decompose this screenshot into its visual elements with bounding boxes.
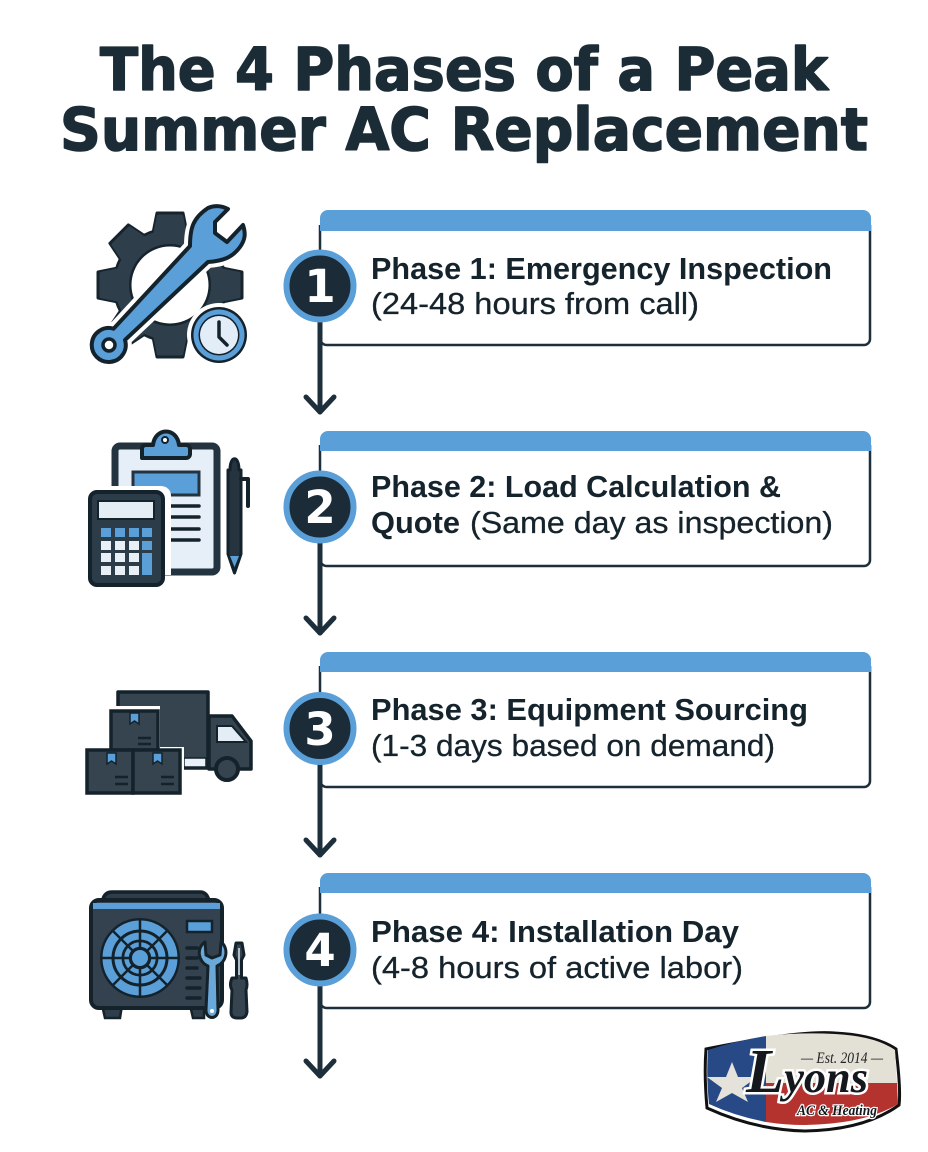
logo: Lyons AC & Heating badge: Lyons bbox=[745, 1038, 868, 1106]
arrow: phase 1 to 2 bbox=[306, 320, 334, 412]
arrow: final bbox=[306, 984, 334, 1076]
arrow: phase 2 to 3 bbox=[306, 540, 334, 633]
logo: Lyons AC & Heating badge bbox=[705, 1033, 900, 1131]
panel: phase 4 bbox=[91, 873, 871, 1076]
icon: gear, wrench and clock bbox=[92, 206, 251, 367]
number badge 4: 4 bbox=[304, 924, 336, 977]
card: phase 2: Phase 2: Load Calculation & bbox=[371, 469, 781, 504]
number badge 4 bbox=[286, 916, 354, 984]
title: Summer AC Replacement bbox=[60, 95, 868, 164]
card: phase 3 bbox=[320, 652, 871, 787]
card: phase 4: (4-8 hours of active labor) bbox=[371, 950, 743, 985]
icon: delivery truck and boxes bbox=[82, 692, 251, 798]
card: phase 2 bbox=[320, 431, 871, 566]
icon: clipboard, calculator and pen bbox=[90, 432, 248, 585]
card: phase 4 bbox=[320, 873, 871, 1008]
number badge 1: 1 bbox=[304, 260, 336, 313]
title: The 4 Phases of a Peak bbox=[100, 35, 830, 104]
panel: phase 2 bbox=[90, 431, 871, 633]
card: phase 1: (24-48 hours from call) bbox=[371, 286, 699, 321]
icon: AC condenser and tools bbox=[91, 892, 247, 1018]
number badge 2 bbox=[286, 474, 354, 540]
card: phase 4: Phase 4: Installation Day bbox=[371, 914, 740, 949]
title bbox=[60, 35, 868, 164]
logo: Lyons AC & Heating badge: AC & Heating bbox=[796, 1103, 877, 1119]
panel: phase 1 bbox=[92, 206, 871, 412]
card: phase 3: (1-3 days based on demand) bbox=[371, 728, 775, 763]
card: phase 2: (Same day as inspection) bbox=[470, 505, 833, 540]
card: phase 2: Quote bbox=[371, 505, 460, 540]
number badge 2: 2 bbox=[304, 481, 336, 534]
panel: phase 3 bbox=[82, 652, 871, 855]
card: phase 3: Phase 3: Equipment Sourcing bbox=[371, 692, 808, 727]
arrow: phase 3 to 4 bbox=[306, 762, 334, 855]
card: phase 1: Phase 1: Emergency Inspection bbox=[371, 251, 832, 286]
logo: Lyons AC & Heating badge: — Est. 2014 — bbox=[800, 1050, 884, 1067]
card: phase 1 bbox=[320, 210, 871, 345]
number badge 1 bbox=[286, 252, 354, 320]
number badge 3 bbox=[286, 695, 354, 762]
number badge 3: 3 bbox=[304, 703, 336, 756]
